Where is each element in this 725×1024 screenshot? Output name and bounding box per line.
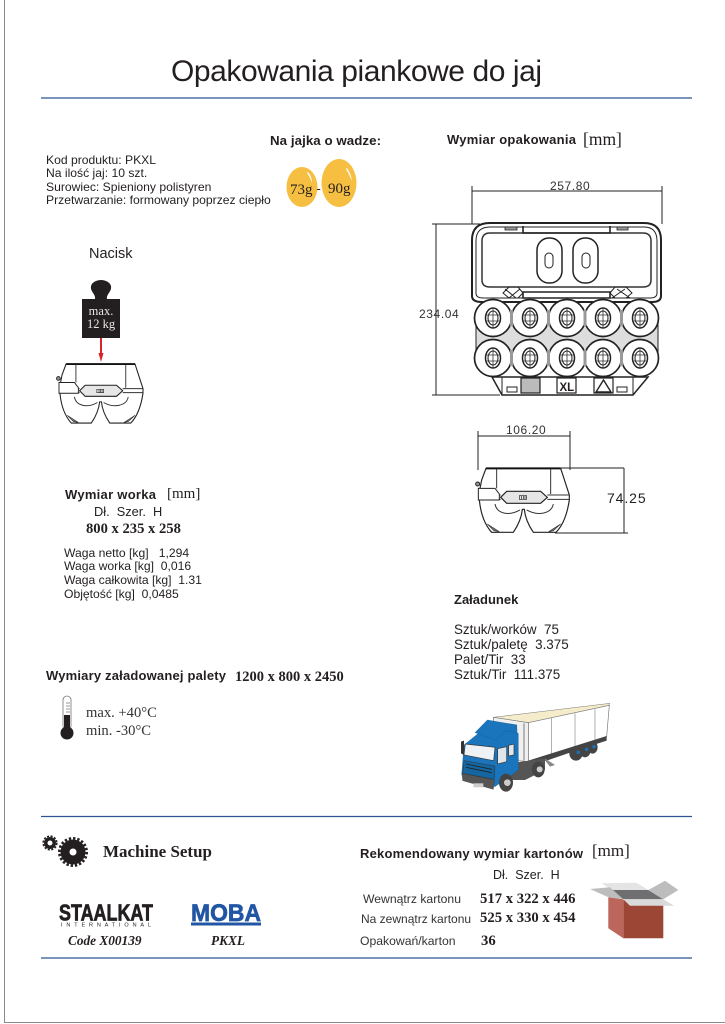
dimension: height 74.25	[555, 468, 647, 533]
bag weights: Waga worka [kg] 0,016	[64, 559, 191, 573]
dimension: height 234.04	[419, 224, 500, 395]
bag weights: Objętość [kg] 0,0485	[64, 587, 179, 601]
product details text	[46, 153, 271, 207]
carton sizes	[360, 891, 576, 949]
carton sizes: Na zewnątrz kartonu	[361, 912, 471, 926]
carton egg cups	[474, 300, 658, 376]
product details text: Kod produktu: PKXL	[46, 153, 156, 167]
temperature range: min. -30°C	[86, 723, 151, 739]
loading data: Palet/Tir 33	[454, 652, 526, 667]
carton base tabs	[492, 377, 648, 395]
egg weight heading: Na jajka o wadze:	[270, 133, 381, 148]
icon: eggs with weights: -	[316, 181, 321, 196]
carton sizes: 517 x 322 x 446	[480, 891, 575, 907]
icon: weight max 12 kg: max.	[89, 304, 113, 318]
bag weights: Waga całkowita [kg] 1.31	[64, 573, 202, 587]
carton sizes: 525 x 330 x 454	[480, 910, 576, 926]
loading data: Załadunek	[454, 592, 519, 607]
dimension: width 257.80	[472, 179, 662, 224]
icon: truck	[461, 703, 610, 792]
bag dimensions: Wymiar worka	[65, 487, 157, 502]
pallet dimensions: Wymiary załadowanej palety	[46, 668, 227, 683]
pressure heading: Nacisk	[89, 246, 133, 262]
pallet dimensions: 1200 x 800 x 2450	[235, 669, 344, 685]
packaging dimensions heading: Wymiar opakowania	[447, 132, 577, 147]
dimension: depth 106.20: 106.20	[506, 423, 546, 437]
recommended carton heading: Rekomendowany wymiar kartonów	[360, 846, 584, 861]
loading data	[454, 592, 569, 682]
logo: Moba: MOBA	[191, 900, 261, 927]
bag dimensions: Dł. Szer. H	[94, 504, 162, 519]
recommended carton heading: [mm]	[592, 841, 630, 860]
icon: thermometer	[60, 696, 74, 740]
icon: eggs with weights: 90g	[328, 181, 351, 197]
bag weights: Waga netto [kg] 1,294	[64, 546, 189, 560]
temperature range: max. +40°C	[86, 705, 157, 721]
icon: weight max 12 kg	[82, 280, 120, 338]
product details text: Przetwarzanie: formowany poprzez ciepło	[46, 193, 271, 207]
dimension: depth 106.20	[478, 423, 570, 470]
bag weights	[64, 546, 202, 601]
bag dimensions: 800 x 235 x 258	[86, 521, 181, 537]
icon: carton side view under pressure	[57, 364, 143, 423]
carton lid	[472, 223, 661, 302]
icon: weight max 12 kg: 12 kg	[87, 317, 116, 331]
logo: Staalkat International: STAALKAT	[59, 900, 153, 926]
dimension: height 234.04: 234.04	[419, 307, 459, 321]
carton base tabs: XL	[560, 382, 574, 394]
packaging dimensions heading	[447, 129, 622, 149]
icon: open cardboard box	[590, 881, 678, 938]
cab wheels	[499, 758, 555, 792]
machine codes: PKXL	[211, 933, 245, 948]
dimension: height 74.25: 74.25	[607, 490, 647, 506]
temperature range	[86, 705, 157, 739]
technical drawing: side view of egg carton	[476, 423, 647, 533]
bag dimensions	[65, 486, 200, 537]
machine codes: Code X00139	[68, 933, 142, 948]
pallet dimensions	[46, 668, 344, 685]
title: Opakowania piankowe do jaj	[171, 55, 542, 88]
cab	[461, 720, 545, 789]
technical drawing: top view of egg carton	[419, 179, 662, 395]
loading data: Sztuk/Tir 111.375	[454, 667, 560, 682]
machine setup heading: Machine Setup	[103, 842, 212, 861]
loading data: Sztuk/worków 75	[454, 622, 559, 637]
recommended carton heading	[360, 841, 630, 882]
dimension: width 257.80: 257.80	[550, 179, 590, 193]
icon: gears	[43, 836, 87, 866]
bag dimensions: [mm]	[167, 486, 200, 502]
carton sizes: Wewnątrz kartonu	[363, 892, 461, 906]
machine codes	[68, 933, 245, 948]
carton sizes: 36	[481, 933, 496, 949]
packaging dimensions heading: [mm]	[583, 129, 622, 149]
trailer wheels	[569, 741, 598, 761]
icon: eggs with weights: 73g	[290, 182, 313, 198]
arrow: pressure	[98, 338, 104, 362]
product details text: Surowiec: Spieniony polistyren	[46, 180, 211, 194]
icon: eggs with weights	[286, 159, 356, 207]
recommended carton heading: Dł. Szer. H	[493, 868, 560, 882]
product details text: Na ilość jaj: 10 szt.	[46, 166, 147, 180]
loading data: Sztuk/paletę 3.375	[454, 637, 569, 652]
carton sizes: Opakowań/karton	[360, 934, 456, 948]
trailer	[493, 703, 610, 764]
logo: Staalkat International: INTERNATIONAL	[61, 922, 151, 928]
